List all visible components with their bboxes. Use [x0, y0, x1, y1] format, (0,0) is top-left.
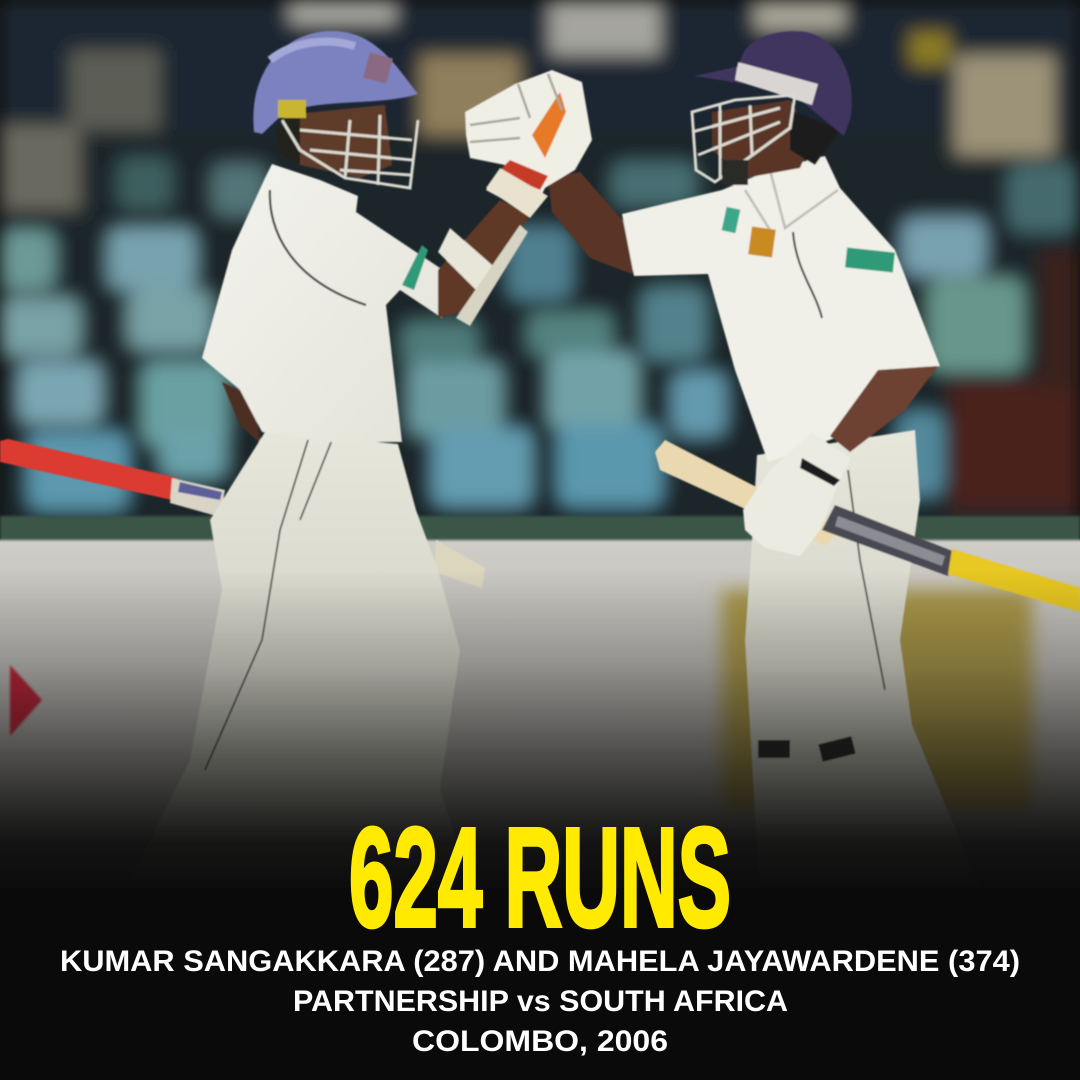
left player helmet — [253, 31, 418, 188]
yellow advertising board — [722, 590, 1032, 810]
left player forearm — [438, 200, 530, 318]
green perimeter strip — [0, 516, 1080, 542]
right player shirt — [622, 156, 940, 462]
blurred stadium background — [0, 0, 1080, 540]
right player forearm — [830, 366, 938, 452]
red arrow on wall — [10, 665, 42, 736]
right player glove — [743, 432, 850, 556]
perimeter wall — [0, 540, 1080, 890]
crest — [748, 226, 776, 258]
sponsor logo — [845, 248, 895, 272]
sleeve logo — [402, 245, 428, 290]
caption line 1: KUMAR SANGAKKARA (287) AND MAHELA JAYAWARDENE (374) — [60, 945, 1020, 978]
left player shirt — [202, 164, 442, 442]
bottom solid area — [0, 888, 1080, 1080]
clasped batting gloves — [465, 70, 592, 218]
left player bat — [0, 439, 485, 588]
caption text — [60, 945, 1020, 1058]
upper arm — [548, 172, 640, 274]
caption line 3: COLOMBO, 2006 — [412, 1025, 668, 1058]
knee straps — [758, 736, 856, 762]
red stand at right — [950, 380, 1080, 510]
right player trousers — [745, 430, 985, 900]
crowd figures — [0, 0, 1055, 210]
caption line 2: PARTNERSHIP vs SOUTH AFRICA — [293, 985, 788, 1018]
right player helmet — [692, 31, 852, 185]
headline: 624 runs: 624 RUNS — [349, 798, 731, 956]
face — [278, 105, 392, 178]
player right: Mahela Jayawardene — [548, 31, 1080, 900]
wrist band — [438, 228, 500, 300]
left player back arm — [222, 382, 262, 445]
player left: Kumar Sangakkara — [0, 31, 530, 880]
right player bat — [655, 440, 1080, 612]
bottom dark fade — [0, 570, 1080, 890]
left player trousers — [130, 432, 470, 880]
seats — [0, 158, 1078, 510]
